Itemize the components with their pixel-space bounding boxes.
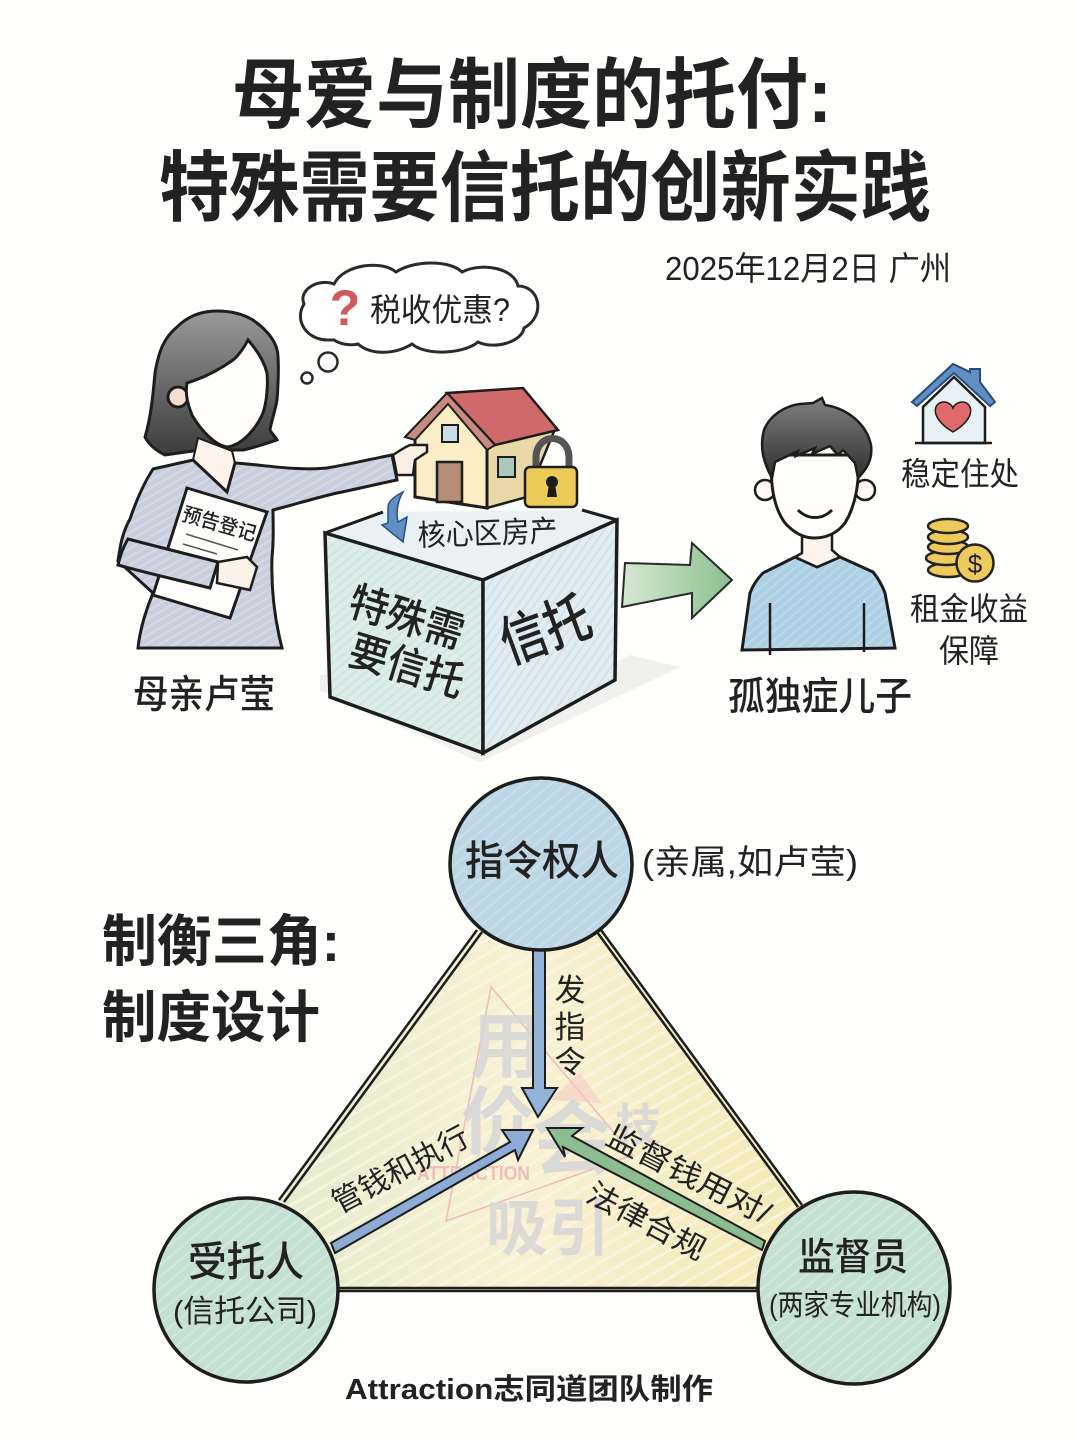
rent income label [910, 591, 1028, 669]
mother figure [118, 311, 397, 648]
watermark: 会 [532, 1096, 612, 1185]
arrow: instruction [522, 950, 557, 1117]
node: instructing party: 指令权人 [465, 838, 619, 884]
son sleeve lines [770, 603, 864, 655]
thought bubble: tax question: ? [330, 280, 360, 336]
box left face text: 要信托 [343, 627, 470, 706]
box right face text: 信托 [492, 585, 600, 675]
title [159, 53, 931, 232]
son smile [798, 510, 832, 518]
mother ear [168, 387, 188, 407]
node: supervisor: 监督员 [798, 1237, 908, 1279]
son ears [755, 480, 875, 500]
mother label: 母亲卢莹 [133, 674, 275, 717]
mother face [186, 340, 267, 447]
instruction label: 令 [554, 1045, 586, 1080]
watermark [417, 987, 661, 1264]
instruction label: 指 [554, 1010, 586, 1045]
label: legal compliance: 法律合规 [581, 1177, 711, 1267]
watermark: 用 [470, 1008, 542, 1088]
box left face text [343, 578, 470, 706]
son hair [762, 398, 871, 478]
mother body [118, 455, 397, 648]
node: trustee: 受托人 [188, 1239, 304, 1285]
son face [771, 455, 858, 538]
box left face text: 特殊需 [343, 578, 470, 657]
watermark: 价 [461, 1081, 535, 1164]
title: 母爱与制度的托付: [232, 53, 832, 139]
arrow: supervisor [547, 1128, 765, 1250]
curved blue arrow into box [382, 492, 407, 542]
watermark: 吸引 [486, 1195, 610, 1264]
icon: coins: $ [968, 549, 983, 579]
instruction label: 发 [554, 973, 586, 1008]
mother forearm [118, 539, 218, 588]
mother hair [145, 311, 278, 455]
section heading: 制衡三角: [102, 910, 340, 973]
date and place: 2025年12月2日 广州 [665, 250, 951, 287]
stable housing label: 稳定住处 [901, 456, 1019, 492]
document: advance registration: 预告登记 [180, 503, 259, 546]
triangle panel [279, 930, 802, 1291]
node: trustee: (信托公司) [173, 1294, 317, 1329]
arrow: trustee manages [331, 1130, 533, 1253]
label: supervise money: 监督钱用对/ [601, 1120, 777, 1231]
padlock icon [525, 438, 577, 507]
house icon [405, 388, 558, 508]
node: supervisor: (两家专业机构) [769, 1289, 941, 1322]
instruction label [554, 973, 586, 1080]
son neck [795, 530, 840, 567]
node: trustee [154, 1198, 338, 1382]
note: relatives: (亲属,如卢莹) [642, 844, 858, 882]
document: advance registration [153, 488, 267, 618]
trust box [320, 510, 680, 762]
rent income label: 租金收益 [910, 591, 1028, 627]
label: manage money: 管钱和执行 [327, 1121, 475, 1220]
watermark: 技 [615, 1100, 661, 1152]
credit: Attraction志同道团队制作 [345, 1373, 713, 1406]
icon: house with heart [912, 364, 995, 443]
node: instructing party [450, 778, 632, 950]
rent income label: 保障 [939, 633, 999, 669]
node: supervisor [758, 1192, 950, 1384]
mother hand holding document [217, 557, 257, 590]
box top label: 核心区房产 [417, 515, 558, 553]
icon: coins [926, 519, 994, 582]
thought bubble: tax question: 税收优惠? [370, 292, 510, 328]
section heading [102, 910, 340, 1049]
watermark: ATTRACTION [417, 1163, 530, 1185]
son figure [742, 398, 895, 655]
arrow: box to son [622, 543, 732, 618]
mother hand pointing [393, 445, 427, 475]
section heading: 制度设计 [102, 986, 320, 1049]
title: 特殊需要信托的创新实践 [159, 146, 931, 232]
mother neck [193, 438, 235, 492]
thought bubble: tax question [300, 263, 538, 384]
son label: 孤独症儿子 [728, 676, 912, 719]
son body [742, 557, 895, 650]
